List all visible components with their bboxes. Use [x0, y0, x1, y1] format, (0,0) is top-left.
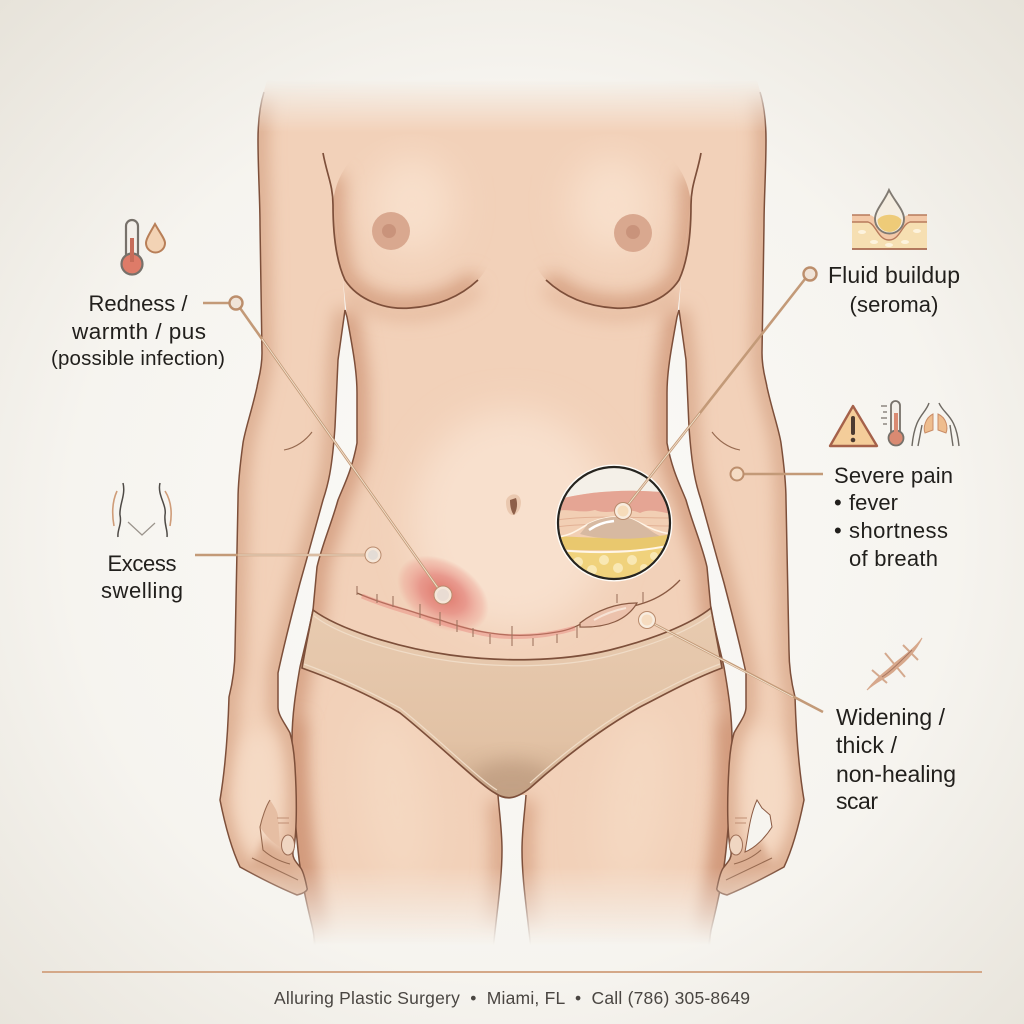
icon: warning triangle: [830, 406, 877, 446]
label: scar: Widening /: [836, 704, 946, 730]
label: scar: non-healing: [836, 761, 956, 787]
label: severe symptoms: shortness: [849, 518, 948, 543]
navel: [506, 494, 521, 515]
leader: fluid: [614, 268, 816, 520]
icon: scar: [867, 638, 922, 690]
leader: severe pain: [730, 468, 823, 480]
icon: lungs: [912, 403, 959, 446]
label: severe symptoms: of breath: [849, 546, 938, 571]
redness area: [400, 558, 486, 630]
left arm and hand: [220, 78, 345, 895]
briefs: [302, 608, 722, 809]
footer contact line: Alluring Plastic Surgery • Miami, FL • Call (786) 305-8649: [274, 988, 750, 1008]
label: fluid buildup: [828, 262, 960, 317]
label: redness: warmth / pus: [71, 319, 206, 344]
label: scar: [836, 704, 956, 814]
leader: scar: [638, 612, 823, 712]
icon: waist outline: [113, 483, 171, 537]
footer rule: [42, 971, 982, 973]
label: severe symptoms: [834, 463, 953, 571]
label: fluid buildup: (seroma): [850, 292, 938, 317]
label: fluid buildup: Fluid buildup: [828, 262, 960, 288]
label: severe symptoms: •: [834, 490, 842, 515]
label: scar: scar: [836, 788, 878, 814]
icon: seroma droplet on skin: [852, 190, 927, 249]
label: severe symptoms: fever: [849, 490, 898, 515]
icon: fever thermometer: [881, 401, 904, 446]
illustration: torso with annotated sites: [220, 78, 804, 950]
label: redness: Redness /: [88, 291, 188, 316]
surgical scar: [357, 580, 680, 646]
label: severe symptoms: •: [834, 518, 842, 543]
leader: swelling: [195, 547, 381, 563]
label: excess swelling: Excess: [108, 551, 176, 576]
label: redness: [51, 291, 225, 370]
icon: thermometer and droplet: [122, 220, 165, 274]
label: redness: (possible infection): [51, 347, 225, 370]
label: excess swelling: swelling: [101, 578, 183, 603]
magnified tissue inset: seroma: [556, 464, 672, 582]
torso and legs: [292, 78, 732, 950]
label: scar: thick /: [836, 732, 898, 758]
label: excess swelling: [101, 551, 183, 603]
leader: redness: [203, 296, 452, 604]
chest contours: [323, 153, 701, 308]
label: severe symptoms: Severe pain: [834, 463, 953, 488]
right arm and hand: [679, 78, 804, 895]
